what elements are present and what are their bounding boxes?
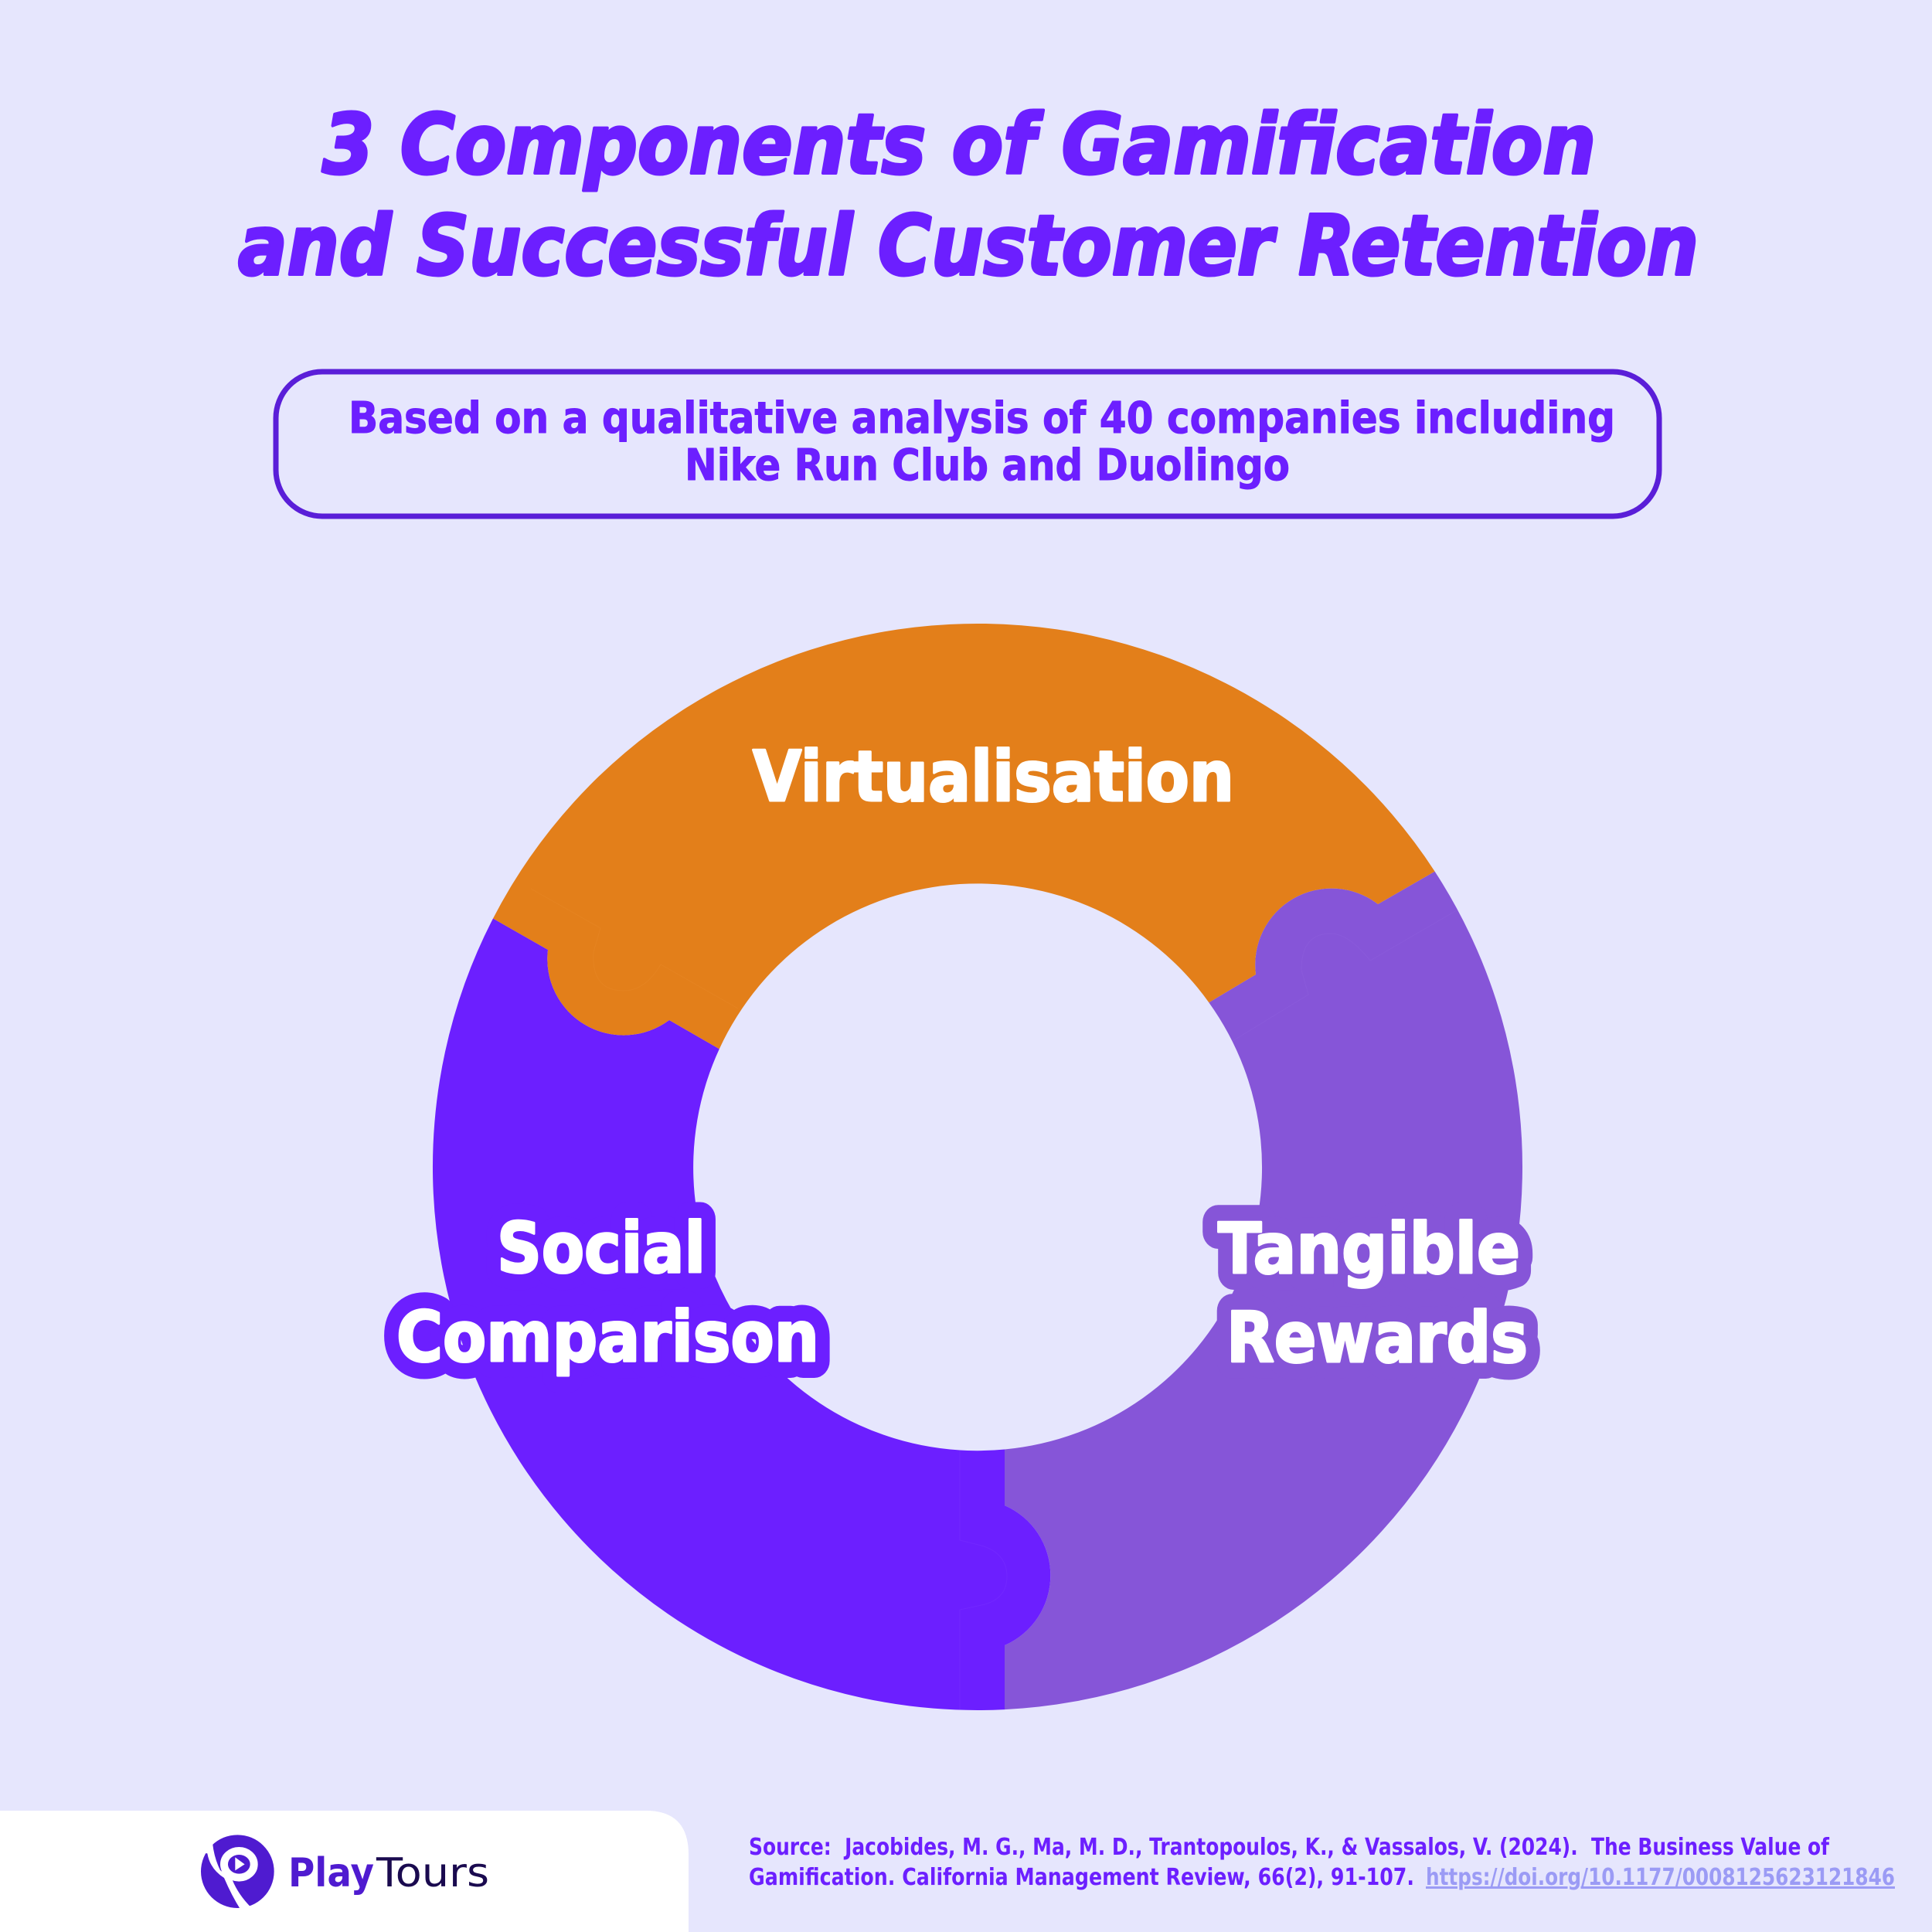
segment: tangible rewards xyxy=(1005,872,1522,1709)
label: tangible rewards: Tangible xyxy=(1218,1209,1520,1290)
segment: virtualisation xyxy=(493,624,1435,1049)
label: tangible rewards xyxy=(1218,1209,1528,1379)
label: social comparison: Comparison xyxy=(396,1297,819,1378)
title xyxy=(238,97,1699,294)
label: tangible rewards: Tangible xyxy=(1218,1209,1520,1290)
label: virtualisation: Virtualisation xyxy=(753,736,1234,818)
logo wordmark xyxy=(288,1850,489,1896)
footer logo panel xyxy=(0,1811,689,1932)
logo wordmark: Tours xyxy=(376,1850,489,1896)
title: 3 Components of Gamification xyxy=(322,97,1596,193)
source citation xyxy=(749,1834,1895,1891)
logo wordmark: Play xyxy=(288,1850,374,1896)
label: social comparison: Social xyxy=(497,1208,706,1289)
title: and Successful Customer Retention xyxy=(238,199,1699,294)
subtitle callout box xyxy=(276,372,1659,516)
label: tangible rewards: Rewards xyxy=(1226,1298,1528,1379)
subtitle callout box: Nike Run Club and Duolingo xyxy=(685,440,1290,491)
label: social comparison: Social xyxy=(497,1208,706,1289)
donut chart xyxy=(396,624,1528,1710)
source citation: Gamification. California Management Review, 66(2), 91-107. xyxy=(749,1864,1414,1891)
label: tangible rewards: Rewards xyxy=(1226,1298,1528,1379)
label: social comparison: Comparison xyxy=(396,1297,819,1378)
label: social comparison xyxy=(396,1208,819,1378)
icon: playtours logo xyxy=(200,1835,274,1910)
subtitle callout box: Based on a qualitative analysis of 40 companies including xyxy=(349,393,1615,444)
segment: social comparison xyxy=(433,918,1050,1710)
seam lines xyxy=(531,889,1457,1709)
